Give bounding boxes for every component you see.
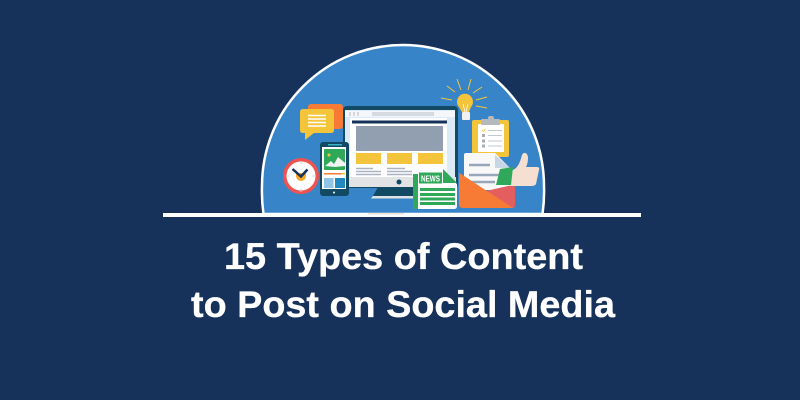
title: to Post on Social Media (191, 284, 615, 325)
icon: speech bubbles (300, 104, 343, 140)
semicircle badge (262, 45, 544, 214)
icon: newspaper (413, 169, 457, 209)
icon: smartphone (320, 142, 349, 196)
icon: clipboard (472, 116, 509, 157)
icon: thumbs up (496, 153, 539, 186)
icon: desktop monitor (343, 106, 458, 198)
icon: clock (285, 160, 317, 192)
title: 15 Types of Content (224, 236, 583, 277)
icon: newspaper: NEWS (421, 174, 440, 184)
icon: light bulb (441, 79, 487, 120)
baseline rule (163, 213, 641, 217)
icon: document in envelope (459, 153, 515, 208)
title (191, 236, 615, 325)
baseline highlight (368, 213, 404, 214)
